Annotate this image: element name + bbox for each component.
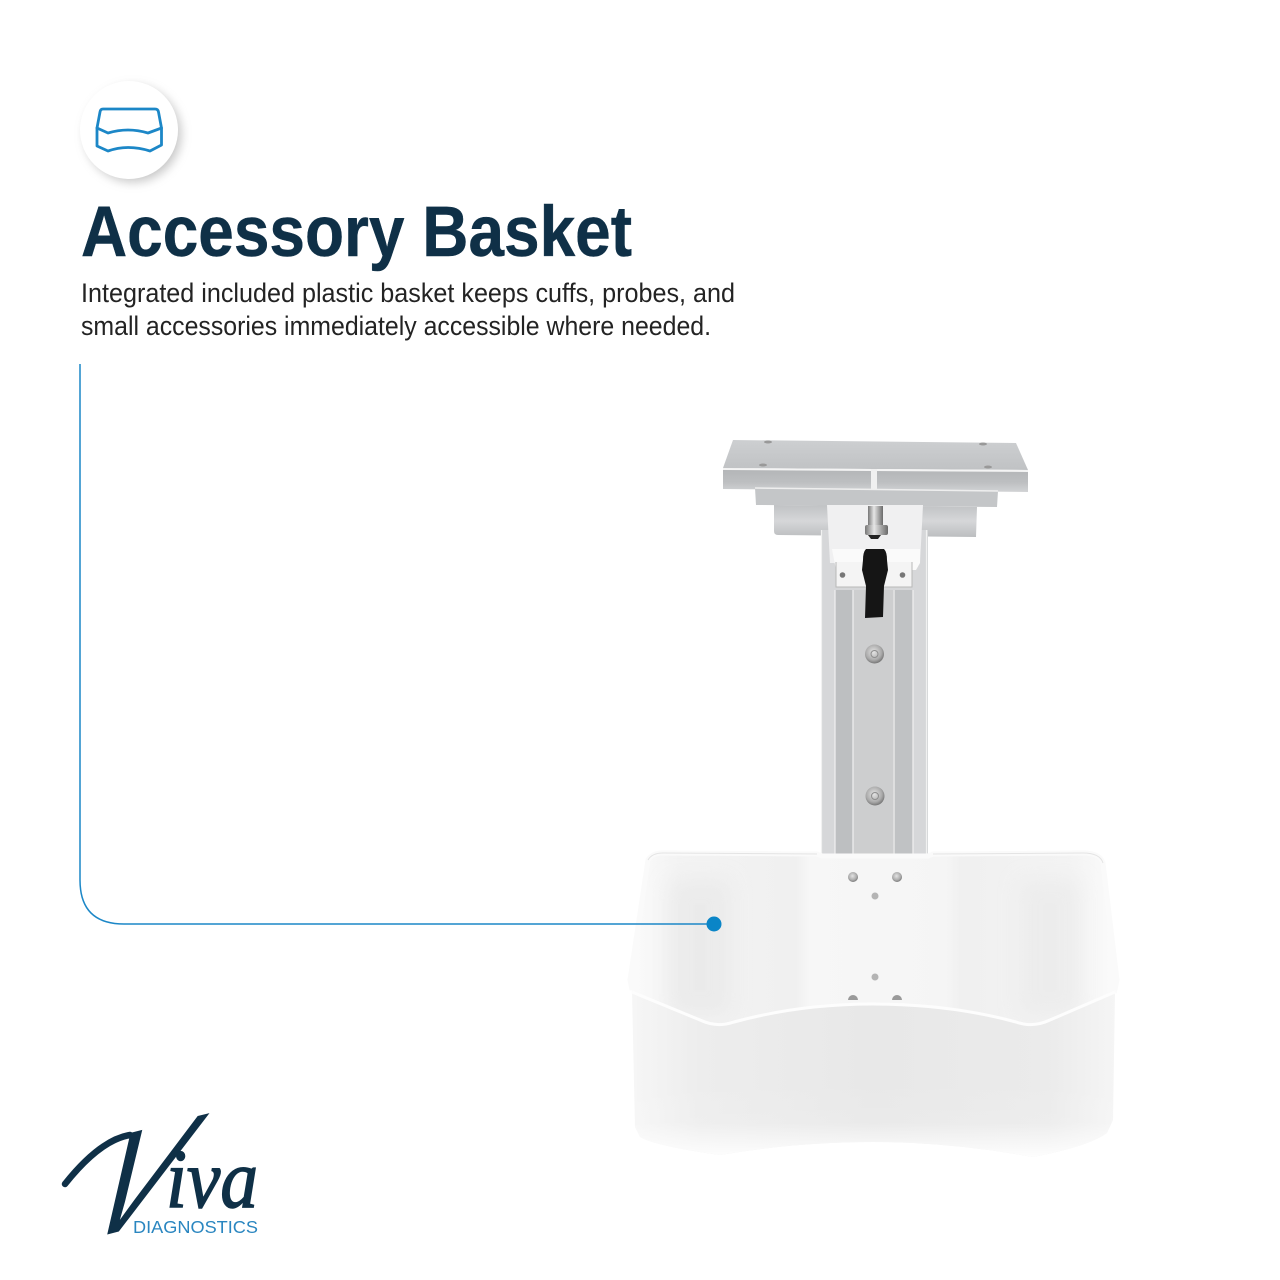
bolt xyxy=(865,506,888,539)
title: Accessory Basket xyxy=(81,193,632,272)
logo subtitle: DIAGNOSTICS xyxy=(133,1217,258,1237)
product photo: mount and basket xyxy=(630,440,1117,1158)
description text: Integrated included plastic basket keeps cuffs, probes, and xyxy=(81,278,735,308)
white bracket xyxy=(827,505,923,563)
icon: basket outline xyxy=(97,109,162,151)
icon badge: basket in circle xyxy=(80,81,181,182)
clamp bars xyxy=(755,488,998,537)
basket front wall xyxy=(632,991,1115,1157)
infographic canvas xyxy=(62,81,1115,1234)
basket back rim xyxy=(630,853,1117,990)
basket screws xyxy=(848,872,902,1000)
callout leader line xyxy=(80,364,714,924)
vertical post xyxy=(821,530,928,858)
black lever knob xyxy=(862,549,888,618)
white clip plate xyxy=(836,562,912,587)
basket xyxy=(630,853,1117,1158)
logo swash xyxy=(65,1135,130,1184)
logo: Viva Diagnostics xyxy=(55,1078,258,1277)
top mounting plate xyxy=(723,440,1028,492)
basket interior xyxy=(630,853,1117,1025)
post screws xyxy=(865,644,884,806)
description text xyxy=(81,278,735,341)
description text: small accessories immediately accessible where needed. xyxy=(81,311,711,341)
logo wordmark: iva xyxy=(166,1133,258,1226)
logo wordmark: V xyxy=(55,1078,228,1277)
callout dot xyxy=(706,916,722,932)
